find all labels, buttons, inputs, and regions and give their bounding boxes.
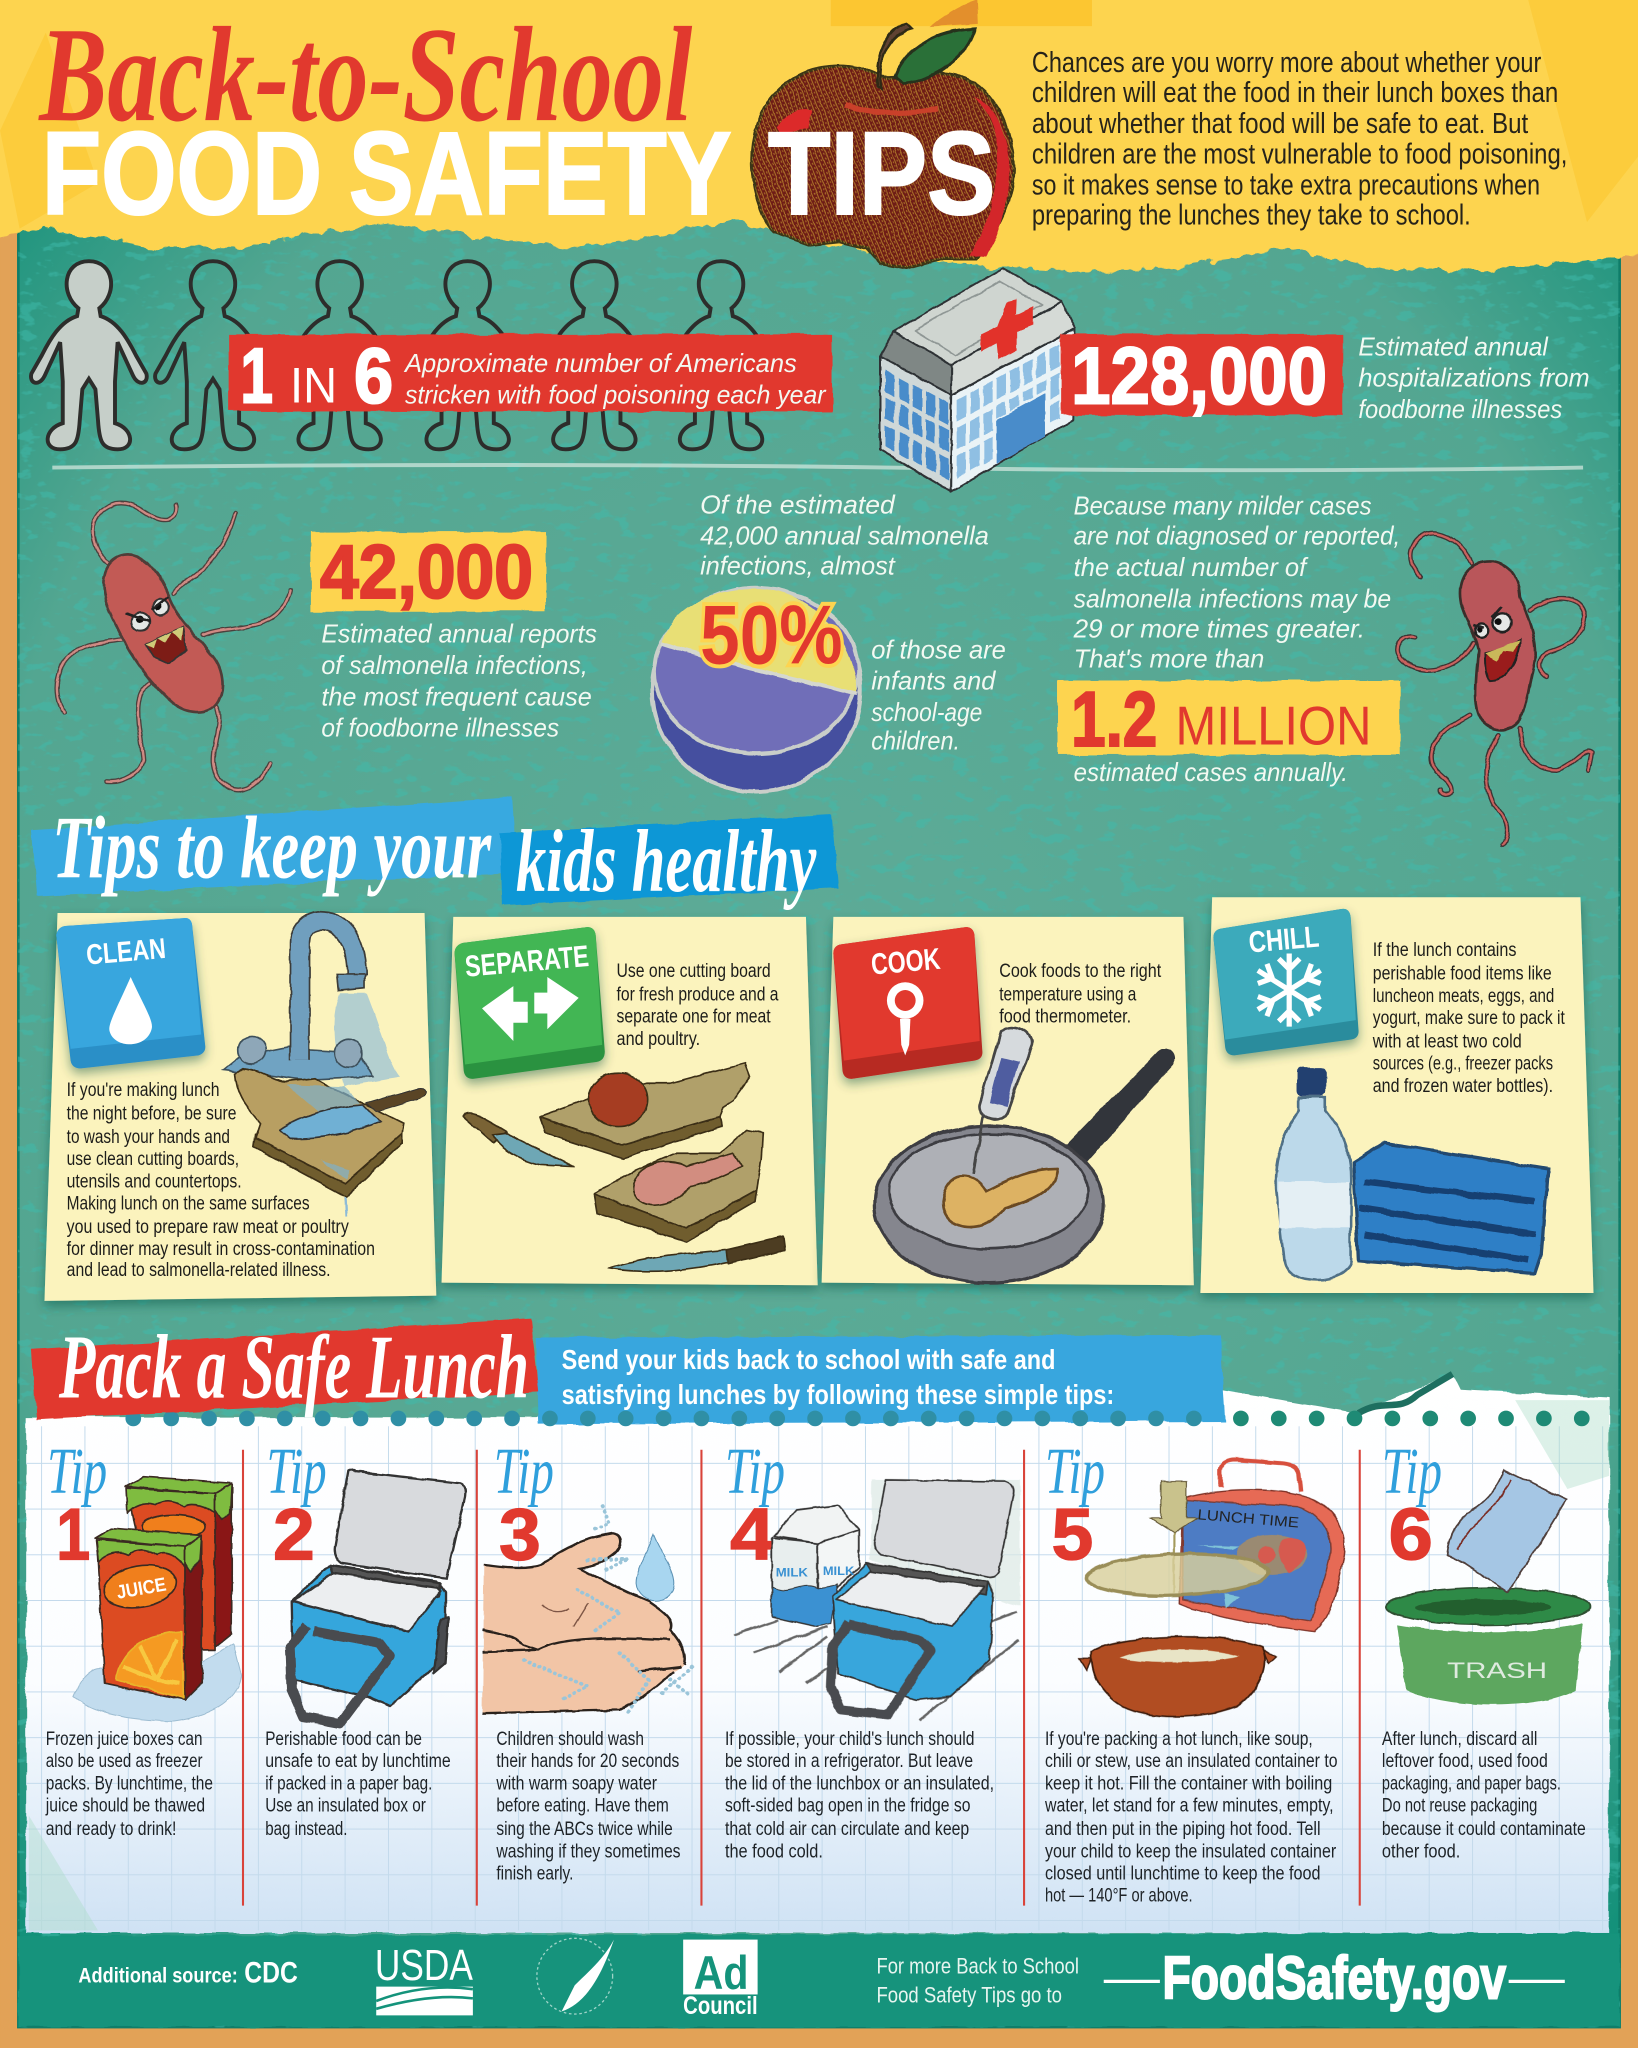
stat: 1 in 6: stricken with food poisoning each year (405, 380, 827, 410)
tip 5 text: water, let stand for a few minutes, empty, (1044, 1796, 1334, 1817)
footer url: FoodSafety.gov (1163, 1944, 1506, 2011)
stat: 128,000: 128,000 (1071, 332, 1327, 422)
tip 4 text: soft-sided bag open in the fridge so (725, 1796, 971, 1817)
tip 4 text: If possible, your child's lunch should (725, 1729, 974, 1750)
tip 6 text: other food. (1382, 1841, 1460, 1862)
stat: 1 in 6: 6 (354, 331, 393, 419)
stat: 1.2 million (1058, 675, 1400, 763)
tip 2: Tip (267, 1436, 327, 1508)
tip 3 text: washing if they sometimes (496, 1841, 681, 1862)
chill text: and frozen water bottles). (1373, 1076, 1553, 1097)
illustration: pan and thermometer (874, 1028, 1175, 1283)
hospitalizations caption: hospitalizations from (1358, 363, 1590, 393)
tip 3: Tip (494, 1436, 554, 1508)
people row (31, 261, 779, 449)
footer band (18, 1933, 1620, 2027)
tip 6: Tip (1382, 1436, 1442, 1508)
tip 3 text: their hands for 20 seconds (496, 1751, 679, 1772)
icon: right salmonella (1397, 533, 1592, 845)
heading: tips to keep your kids healthy (31, 797, 839, 911)
cook text: food thermometer. (999, 1007, 1131, 1028)
tip 4 (725, 1436, 1020, 1862)
illustration: faucet and board (223, 921, 425, 1217)
illustration: cutting boards (463, 1063, 785, 1271)
infections text: Of the estimated (700, 489, 896, 519)
icon: left salmonella (57, 503, 290, 790)
milder cases text: salmonella infections may be (1074, 583, 1391, 613)
illustration: bag and trash can (1386, 1470, 1590, 1705)
50% caption (871, 634, 1006, 756)
tip 5 text: your child to keep the insulated container (1045, 1841, 1336, 1862)
hospitalizations caption (1358, 331, 1590, 424)
stat: 1 in 6: IN (290, 357, 337, 413)
42,000 caption: of foodborne illnesses (321, 713, 559, 743)
logo: HHS (537, 1938, 614, 2014)
tip 2 text: Perishable food can be (265, 1729, 422, 1750)
separate text: Use one cutting board (617, 961, 771, 982)
tip 3 text: before eating. Have them (496, 1796, 669, 1817)
tip 6 text (1382, 1729, 1586, 1862)
tip 6 text: because it could contaminate (1382, 1819, 1586, 1840)
logo: Ad Council (683, 1940, 758, 2020)
icon: hospital (880, 268, 1075, 492)
tip 1: 1 (56, 1495, 90, 1576)
stat: 1 in 6: 1 (240, 331, 273, 419)
footer call to action (876, 1954, 1079, 2007)
tip 3 text: Children should wash (496, 1729, 644, 1750)
badge: separate: SEPARATE (464, 940, 590, 984)
tip 4: Tip (725, 1436, 785, 1508)
tip 5: Tip (1045, 1436, 1105, 1508)
tip 2 (265, 1436, 465, 1840)
illustration: bag and trash can: TRASH (1447, 1658, 1547, 1683)
logo: USDA: USDA (375, 1942, 473, 1990)
intro paragraph: preparing the lunches they take to school. (1032, 200, 1471, 232)
intro paragraph: about whether that food will be safe to eat. But (1032, 108, 1528, 140)
separate text: separate one for meat (617, 1007, 771, 1028)
tip 6 text: packaging, and paper bags. (1382, 1773, 1561, 1794)
tip 5 text: If you're packing a hot lunch, like soup, (1045, 1729, 1313, 1750)
tip 3: 3 (499, 1495, 541, 1576)
footer source (78, 1957, 298, 1990)
chill text: yogurt, make sure to pack it (1373, 1008, 1565, 1029)
clean text: use clean cutting boards, (67, 1149, 239, 1170)
tip 4: 4 (730, 1495, 775, 1576)
panel: clean (44, 913, 436, 1301)
tip 1 text: also be used as freezer (46, 1751, 203, 1772)
tip 2 text: bag instead. (265, 1819, 347, 1840)
tip 6 text: After lunch, discard all (1382, 1729, 1537, 1750)
title: TIPS (768, 108, 995, 239)
tip 5 (1044, 1436, 1344, 1907)
illustration: insulated bag (290, 1469, 465, 1723)
tip 5: 5 (1051, 1495, 1093, 1576)
heading: tips to keep your kids healthy: Tips to keep your (52, 800, 492, 898)
footer source: CDC (244, 1957, 298, 1990)
illustration: washing hands (483, 1507, 691, 1713)
badge: separate (455, 927, 605, 1079)
title: FOOD SAFETY (42, 108, 731, 239)
badge: chill (1213, 909, 1359, 1055)
clean text: and lead to salmonella-related illness. (67, 1260, 331, 1281)
chill text: with at least two cold (1372, 1032, 1522, 1053)
cook text: Cook foods to the right (999, 961, 1162, 982)
badge: cook (833, 927, 982, 1079)
tip 5 text: closed until lunchtime to keep the food (1045, 1864, 1321, 1885)
milder cases text: That's more than (1074, 643, 1264, 673)
badge: cook: COOK (870, 943, 942, 982)
milder cases text: 29 or more times greater. (1073, 613, 1365, 643)
tip 2 text: Use an insulated box or (265, 1796, 426, 1817)
tip 1 text: Frozen juice boxes can (46, 1729, 203, 1750)
illustration: juice boxes (73, 1477, 242, 1722)
illustration: juice boxes: JUICE (115, 1574, 168, 1604)
tip 6: 6 (1388, 1495, 1433, 1576)
tip 4 text: the lid of the lunchbox or an insulated, (725, 1773, 994, 1794)
footer call to action: For more Back to School (876, 1954, 1079, 1979)
stat: 1.2 million: 1.2 (1071, 675, 1157, 763)
tip 3 (483, 1436, 691, 1885)
intro paragraph (1032, 47, 1567, 232)
chill text: perishable food items like (1373, 964, 1552, 985)
cook text (999, 961, 1162, 1028)
tip 5 text: chili or stew, use an insulated container to (1045, 1751, 1338, 1772)
50% caption: infants and (871, 666, 997, 696)
tip 1 text (45, 1729, 213, 1840)
chill text (1372, 940, 1565, 1097)
milder cases text: are not diagnosed or reported, (1074, 521, 1400, 551)
50% caption: children. (871, 726, 960, 756)
badge: clean (56, 918, 205, 1068)
title: Back-to-School (38, 0, 693, 150)
tip 4 text (725, 1729, 994, 1862)
hospitalizations caption: foodborne illnesses (1358, 394, 1562, 424)
clean text (67, 1080, 375, 1281)
tip 1: Tip (47, 1436, 107, 1508)
chalk divider (52, 465, 1583, 470)
clean text: If you're making lunch (67, 1080, 219, 1101)
intro paragraph: Chances are you worry more about whether your (1032, 47, 1542, 79)
illustration: milk and bag in fridge: MILK (823, 1564, 854, 1578)
42,000 caption: Estimated annual reports (321, 619, 597, 649)
tip 2 text (265, 1729, 451, 1840)
tip 2: 2 (273, 1495, 315, 1576)
heading: send your kids banner: Send your kids back to school with safe and (562, 1344, 1055, 1375)
tip 5 text: and then put in the piping hot food. Tell (1045, 1819, 1321, 1840)
tip 4 text: be stored in a refrigerator. But leave (725, 1751, 973, 1772)
illustration: lunchbox and bowl (1079, 1460, 1344, 1717)
tip 6 (1382, 1436, 1590, 1862)
separate text (617, 961, 779, 1050)
separate text: for fresh produce and a (617, 984, 779, 1005)
icon: apple (752, 0, 1014, 268)
pie chart: 50%: 50% (700, 588, 843, 682)
chill text: sources (e.g., freezer packs (1373, 1054, 1553, 1075)
infections text (700, 489, 989, 581)
tip 5 text: keep it hot. Fill the container with boiling (1045, 1773, 1332, 1794)
separate text: and poultry. (617, 1029, 700, 1050)
logo: Ad Council: Council (683, 1993, 758, 2020)
panel: separate (442, 917, 818, 1285)
pie chart: 50% (652, 588, 861, 792)
clean text: for dinner may result in cross-contamination (67, 1239, 375, 1260)
42,000 caption (321, 619, 597, 743)
clean text: Making lunch on the same surfaces (67, 1193, 310, 1214)
milder cases text: Because many milder cases (1074, 491, 1371, 521)
tip dividers (243, 1450, 1360, 1906)
stat: 1.2 million: MILLION (1176, 694, 1371, 756)
42,000 caption: the most frequent cause (321, 681, 592, 711)
stat: 42,000: 42,000 (320, 530, 533, 615)
infections text: infections, almost (700, 551, 896, 581)
heading: send your kids banner: satisfying lunches by following these simple tips: (562, 1379, 1114, 1410)
heading: tips to keep your kids healthy: kids healthy (516, 813, 817, 911)
logo: Ad Council: Ad (694, 1946, 748, 1999)
panel: cook (822, 917, 1194, 1285)
badge: clean: CLEAN (85, 933, 167, 972)
clean text: utensils and countertops. (67, 1171, 242, 1192)
tip 3 text (496, 1729, 681, 1885)
chill text: luncheon meats, eggs, and (1373, 986, 1554, 1007)
tip 6 text: leftover food, used food (1382, 1751, 1548, 1772)
tip 1 text: and ready to drink! (46, 1819, 176, 1840)
tip 1 text: packs. By lunchtime, the (46, 1773, 213, 1794)
infections text: 42,000 annual salmonella (700, 521, 989, 551)
illustration: lunchbox and bowl: LUNCH TIME (1197, 1507, 1300, 1531)
chill text: If the lunch contains (1373, 940, 1516, 961)
clean text: the night before, be sure (67, 1103, 236, 1124)
logo: USDA (375, 1942, 473, 2015)
heading: pack a safe lunch: Pack a Safe Lunch (58, 1317, 529, 1418)
tip 2 text: unsafe to eat by lunchtime (265, 1751, 451, 1772)
50% caption: school-age (871, 697, 982, 727)
tip 5 text: hot — 140°F or above. (1045, 1886, 1193, 1907)
footer call to action: Food Safety Tips go to (876, 1982, 1062, 2007)
milder cases text (1073, 491, 1400, 673)
hospitalizations caption: Estimated annual (1358, 331, 1549, 361)
tip 3 text: with warm soapy water (496, 1773, 657, 1794)
cook text: temperature using a (999, 984, 1137, 1005)
tip 6 text: Do not reuse packaging (1382, 1796, 1537, 1817)
tip 5 text (1044, 1729, 1338, 1907)
clean text: you used to prepare raw meat or poultry (67, 1217, 349, 1238)
1.2 million caption: estimated cases annually. (1074, 757, 1348, 787)
tip 4 text: the food cold. (725, 1841, 823, 1862)
badge: chill: CHILL (1247, 921, 1321, 960)
heading: pack a safe lunch (31, 1317, 538, 1420)
tip 3 text: sing the ABCs twice while (496, 1819, 673, 1840)
illustration: milk and bag in fridge: MILK (776, 1566, 808, 1579)
stat: 1 in 6: Approximate number of Americans (403, 348, 797, 378)
stat: 1 in 6 (229, 331, 832, 419)
tip 1 (45, 1436, 242, 1840)
tip 3 text: finish early. (496, 1864, 573, 1885)
panel: chill (1200, 897, 1594, 1293)
tip 1 text: juice should be thawed (45, 1796, 205, 1817)
clean text: to wash your hands and (67, 1127, 230, 1148)
milder cases text: the actual number of (1074, 552, 1309, 582)
torn yellow header (0, 0, 1638, 272)
heading: send your kids banner (536, 1335, 1225, 1424)
paper punch holes (133, 1412, 1594, 1424)
illustration: water bottle and ice packs (1276, 1067, 1548, 1280)
tip 4 text: that cold air can circulate and keep (725, 1819, 969, 1840)
footer source: Additional source: (78, 1965, 238, 1988)
title (38, 0, 995, 239)
notebook paper (26, 1374, 1609, 1933)
42,000 caption: of salmonella infections, (321, 650, 588, 680)
tip 2 text: if packed in a paper bag. (265, 1773, 432, 1794)
illustration: milk and bag in fridge (734, 1480, 1020, 1720)
50% caption: of those are (871, 634, 1006, 664)
